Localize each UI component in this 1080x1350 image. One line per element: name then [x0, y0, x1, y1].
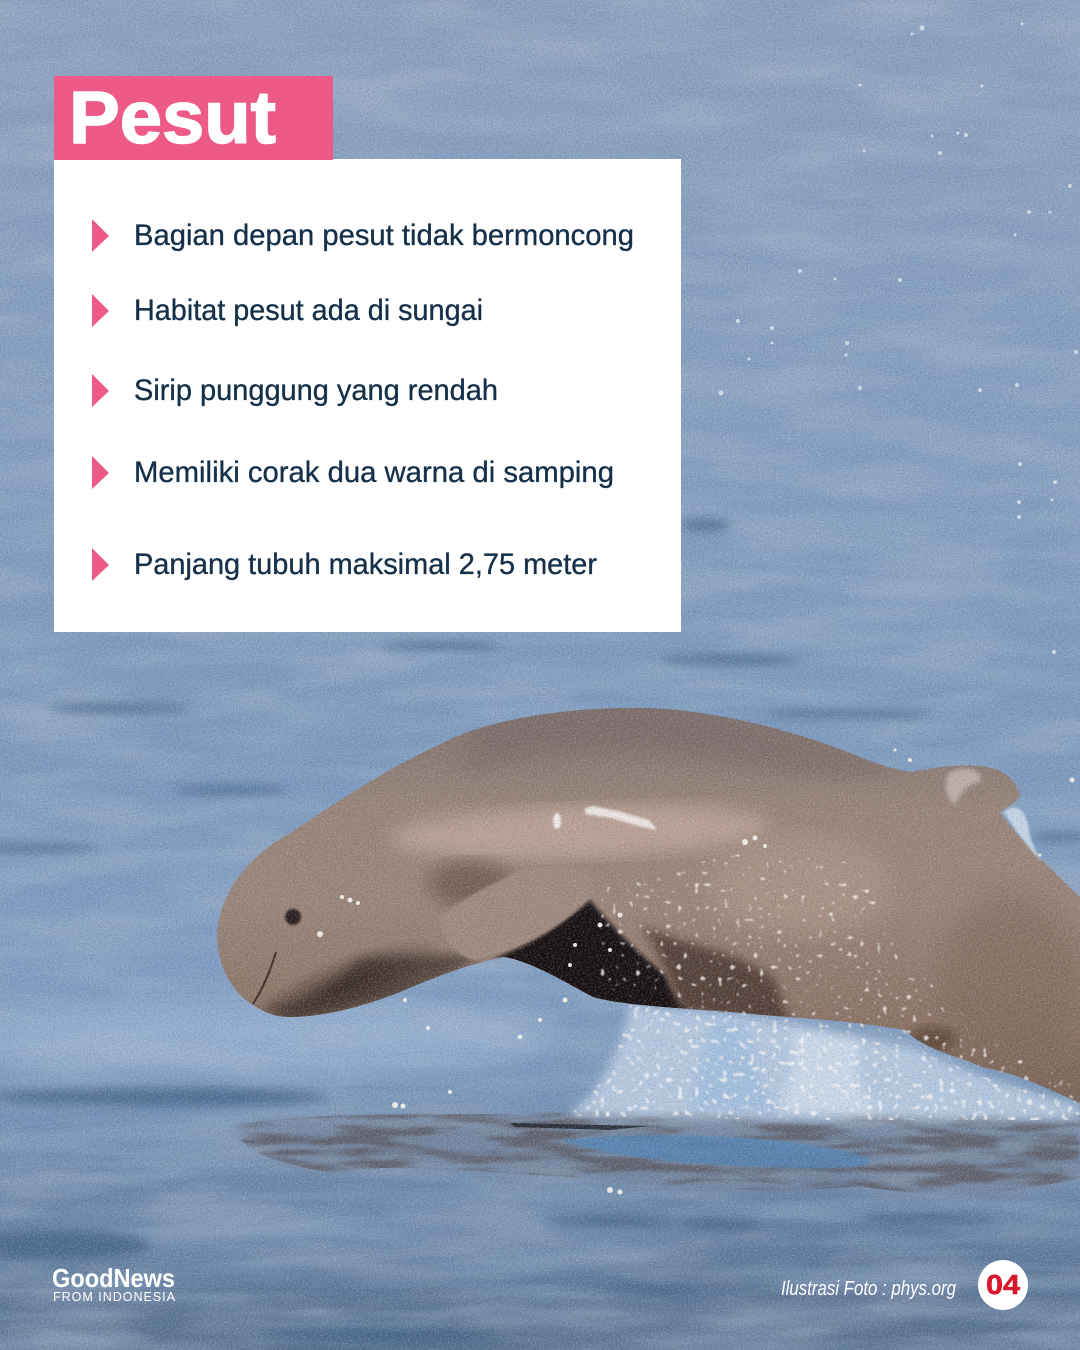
item 1: Bagian depan pesut tidak bermoncong — [134, 219, 634, 252]
dark patch by flipper — [428, 860, 512, 908]
darker rear flank — [946, 888, 1074, 1016]
page number badge: 04 — [986, 1269, 1020, 1300]
water reflection under the pesut — [235, 1111, 1080, 1194]
wet speckles on flank — [590, 840, 1080, 1120]
dorsal water trickle — [1004, 808, 1042, 862]
panel: facts list — [54, 159, 681, 632]
title: Pesut: Pesut — [69, 76, 276, 159]
light flank — [389, 799, 771, 865]
illustration: pesut dolphin leaping — [217, 708, 1080, 1120]
item 4: Memiliki corak dua warna di samping — [134, 456, 614, 489]
mouth line — [253, 952, 276, 1004]
dark belly — [495, 900, 690, 1012]
back shading — [472, 728, 876, 776]
lower rear shadow — [908, 1026, 956, 1054]
item 2: Habitat pesut ada di sungai — [134, 294, 483, 327]
dark jaw — [262, 943, 430, 1017]
dorsal fin highlight — [946, 769, 981, 805]
body highlights — [553, 806, 657, 830]
item 5: Panjang tubuh maksimal 2,75 meter — [134, 548, 597, 581]
eye — [285, 909, 301, 925]
logo: GoodNews from Indonesia: FROM INDONESIA — [53, 1290, 176, 1304]
item 3: Sirip punggung yang rendah — [134, 374, 498, 407]
flipper — [440, 866, 594, 960]
bullet list — [92, 219, 634, 581]
page number badge — [978, 1260, 1028, 1310]
water droplets — [317, 748, 1074, 1194]
distant water specks — [718, 22, 1078, 654]
water splash — [560, 1000, 1080, 1125]
